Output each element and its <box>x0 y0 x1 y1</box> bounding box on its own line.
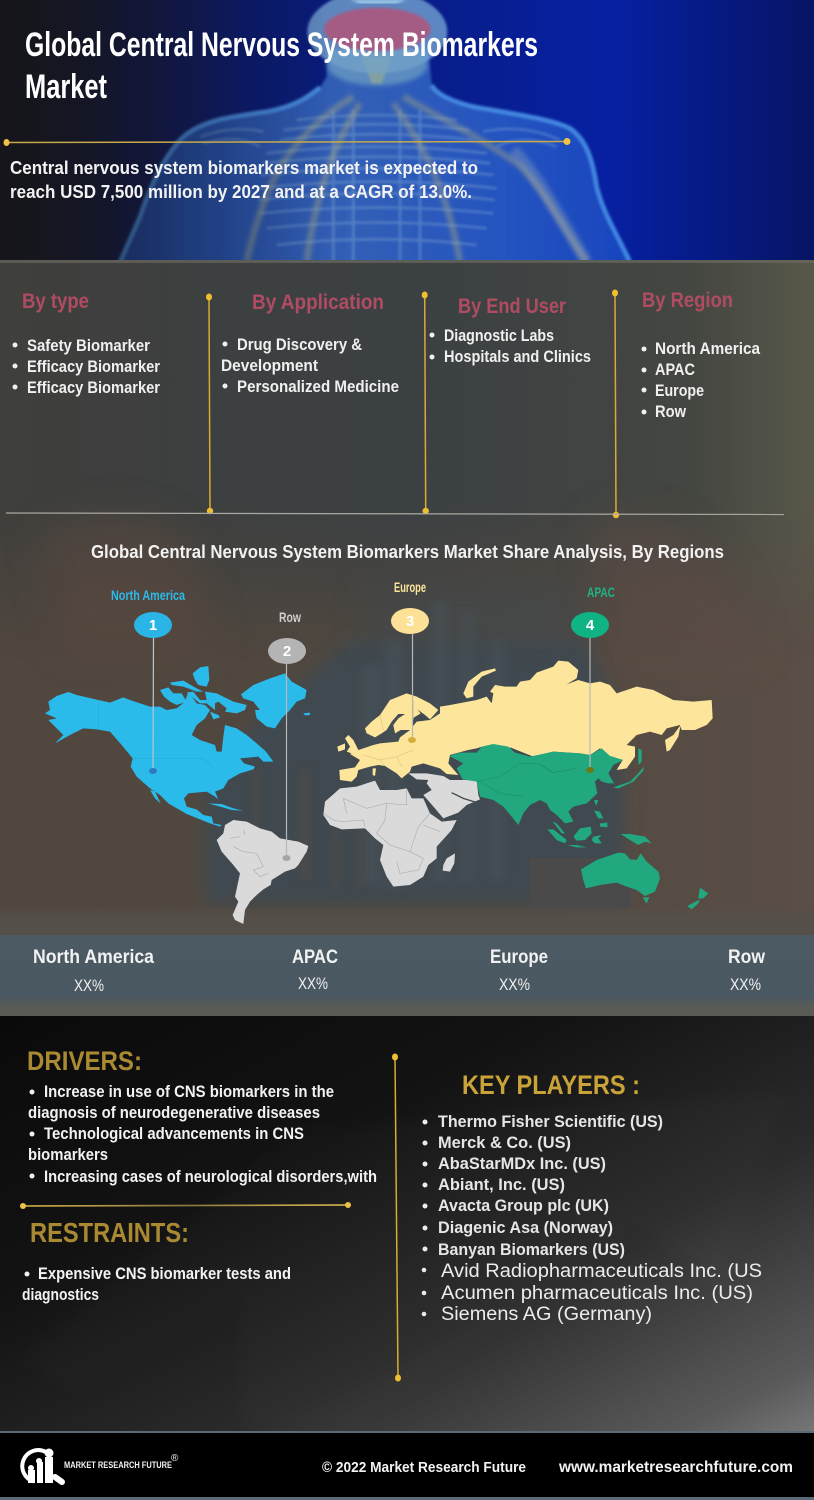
map pin 3: Europe: Europe <box>394 579 426 595</box>
restraints list: diagnostics <box>22 1286 99 1304</box>
drivers heading: DRIVERS: <box>27 1046 142 1076</box>
map region: North America <box>45 666 310 827</box>
segment column: By type: Efficacy Biomarker <box>27 358 161 376</box>
logo: ® <box>171 1453 179 1464</box>
key players list: Avacta Group plc (UK) <box>438 1197 609 1215</box>
share: Europe: Europe <box>490 947 548 968</box>
map region: Rest of World <box>217 773 480 924</box>
share: North America: XX% <box>74 976 104 995</box>
drivers list: biomarkers <box>28 1146 108 1164</box>
segment column: By End User: By End User <box>458 295 566 318</box>
share: North America <box>33 947 154 995</box>
panel: regional share band <box>0 935 814 1016</box>
drivers list <box>28 1083 377 1186</box>
drivers list: Increase in use of CNS biomarkers in the <box>44 1083 334 1101</box>
segment column: By Region: North America <box>655 340 761 358</box>
logo <box>22 1448 179 1483</box>
divider line <box>4 138 570 146</box>
center divider <box>392 1054 401 1382</box>
key players list: Banyan Biomarkers (US) <box>438 1241 625 1259</box>
segment column: By Region <box>642 289 761 421</box>
map pin 1: North America <box>111 587 185 774</box>
restraints list: Expensive CNS biomarker tests and <box>38 1265 291 1283</box>
key players list: Avid Radiopharmaceuticals Inc. (US <box>441 1261 762 1282</box>
map pin 4: APAC: 4 <box>586 617 595 634</box>
segment column: By End User: Hospitals and Clinics <box>444 348 591 366</box>
title: Global Central Nervous System Biomarkers <box>25 26 538 64</box>
restraints heading: RESTRAINTS: <box>30 1217 189 1248</box>
key players list: Siemens AG (Germany) <box>441 1304 652 1325</box>
segment column: By Application: Development <box>221 357 318 375</box>
key players heading: KEY PLAYERS : <box>462 1070 640 1100</box>
panel: segments and map background <box>0 260 814 962</box>
segment column: By Region: Europe <box>655 382 704 400</box>
restraints list <box>22 1265 291 1304</box>
share: Europe: XX% <box>499 975 530 994</box>
segment column: By Application <box>221 291 399 396</box>
world map <box>45 661 713 924</box>
map region: Asia Pacific <box>449 744 708 909</box>
key players list: Merck & Co. (US) <box>438 1134 571 1152</box>
share: APAC: XX% <box>298 974 328 993</box>
drivers list: Increasing cases of neurological disorders,with <box>44 1168 377 1186</box>
share: APAC: APAC <box>292 947 338 968</box>
segment column: By type: Safety Biomarker <box>27 337 151 355</box>
summary text: reach USD 7,500 million by 2027 and at a CAGR of 13.0%. <box>10 182 472 202</box>
share: Europe <box>490 947 548 994</box>
website: www.marketresearchfuture.com <box>558 1459 793 1476</box>
map pin 2: Row <box>268 609 306 861</box>
map pin 2: Row: 2 <box>283 643 291 660</box>
segment column: By Application: Personalized Medicine <box>237 378 399 396</box>
summary text <box>10 158 478 202</box>
panel: drivers, restraints, key players <box>0 1016 814 1432</box>
drivers list: Technological advancements in CNS <box>44 1125 304 1143</box>
logo: MARKET RESEARCH FUTURE <box>64 1460 172 1470</box>
column dividers <box>6 290 784 518</box>
summary text: Central nervous system biomarkers market is expected to <box>10 158 478 178</box>
map pin 3: Europe: 3 <box>406 613 414 630</box>
segment column: By Region: Row <box>655 403 686 421</box>
key players list: Acumen pharmaceuticals Inc. (US) <box>441 1283 753 1304</box>
title <box>25 26 538 106</box>
key players list <box>422 1113 762 1325</box>
segment column: By Region: By Region <box>642 289 733 312</box>
map pin 4: APAC: APAC <box>587 584 615 600</box>
map region: Europe and Russia <box>337 661 713 782</box>
title: Market <box>25 68 107 106</box>
map pin 1: North America: North America <box>111 587 185 603</box>
map pin 1: North America: 1 <box>149 617 157 634</box>
map section heading: Global Central Nervous System Biomarkers Market Share Analysis, By Regions <box>91 542 724 562</box>
key players list: AbaStarMDx Inc. (US) <box>438 1155 606 1173</box>
share: Row: XX% <box>730 975 761 994</box>
map pin 2: Row: Row <box>279 609 301 625</box>
segment column: By type: Efficacy Biomarker <box>27 379 161 397</box>
segment column: By Application: By Application <box>252 291 384 314</box>
drivers list: diagnosis of neurodegenerative diseases <box>28 1104 320 1122</box>
drivers divider <box>20 1202 351 1209</box>
key players list: Abiant, Inc. (US) <box>438 1176 565 1194</box>
key players list: Thermo Fisher Scientific (US) <box>438 1113 663 1131</box>
panel: hero header <box>0 0 814 262</box>
key players list: Diagenic Asa (Norway) <box>438 1219 613 1237</box>
segment column: By type <box>12 290 161 397</box>
segment column: By End User: Diagnostic Labs <box>444 327 554 345</box>
share: APAC <box>292 947 338 993</box>
segment column: By type: By type <box>22 290 89 313</box>
map pin 4: APAC <box>571 584 615 773</box>
share: Row <box>728 947 765 994</box>
map pin 3: Europe <box>391 579 429 743</box>
share: North America: North America <box>33 947 154 968</box>
segment column: By Application: Drug Discovery & <box>237 336 362 354</box>
panel: footer <box>0 1431 814 1500</box>
copyright: © 2022 Market Research Future <box>322 1459 526 1476</box>
share: Row: Row <box>728 947 765 968</box>
illustration: human nervous system <box>120 0 630 262</box>
segment column: By Region: APAC <box>655 361 695 379</box>
segment column: By End User <box>430 295 591 366</box>
